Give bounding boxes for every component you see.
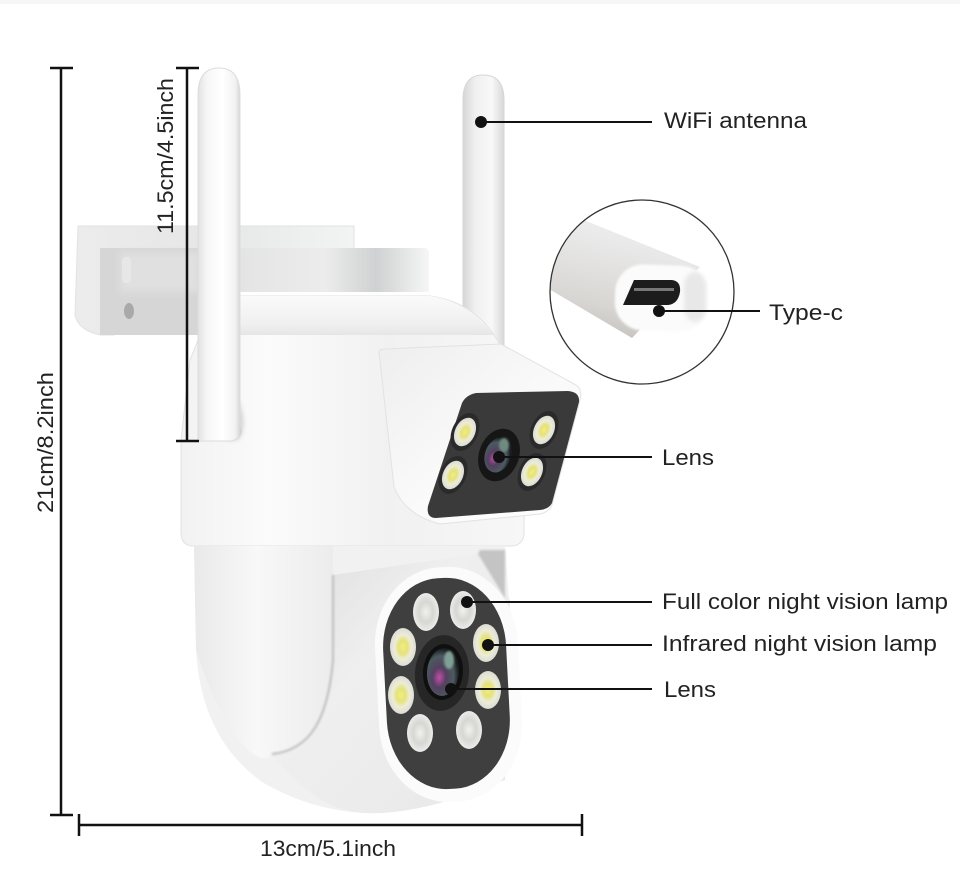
callout: Type-c [653,300,843,325]
dimension: antenna height: 11.5cm/4.5inch [153,78,178,234]
upper camera body [181,296,525,546]
mount disk [240,248,429,292]
dark panel [380,575,513,792]
callout: upper Lens [493,445,714,470]
dimension: total height [33,68,73,815]
LED [433,451,473,499]
LED [512,448,552,496]
callout: lower Lens [445,677,716,702]
left antenna [198,68,242,441]
upper camera head [379,344,581,524]
callout: Type-c: Type-c [769,300,843,325]
dimension: width [79,814,582,861]
infrared lamps [388,624,501,714]
right antenna [463,75,504,345]
full colour lamps [407,591,482,752]
callout: Full color night vision lamp: Full color night vision lamp [662,589,948,614]
callout: Full color night vision lamp [461,589,948,614]
lower camera face [371,563,526,806]
callout: upper Lens: Lens [662,445,714,470]
wall mount bracket [75,226,354,335]
dark front panel [428,391,579,518]
lens [471,423,527,487]
callout: WiFi antenna [475,108,808,133]
callout: Infrared night vision lamp: Infrared night vision lamp [662,631,937,656]
lower dome body [194,546,512,813]
dimension: total height: 21cm/8.2inch [33,372,58,513]
dimension: width: 13cm/5.1inch [260,836,396,861]
LED [445,408,485,456]
callout: WiFi antenna: WiFi antenna [664,108,808,133]
Type-C detail circle [549,199,735,385]
callout: Infrared night vision lamp [482,631,937,656]
callout: lower Lens: Lens [664,677,716,702]
LED [524,406,564,454]
dimension: antenna height [153,68,199,441]
lens [412,633,472,713]
